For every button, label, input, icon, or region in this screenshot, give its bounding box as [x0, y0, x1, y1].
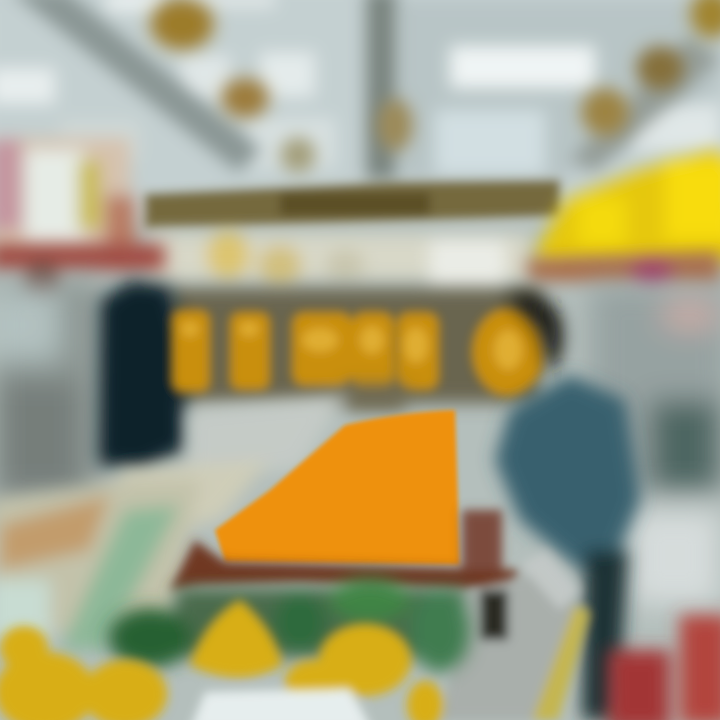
aisle floor and cart rails	[440, 550, 590, 720]
ceiling lights	[0, 0, 720, 175]
orange display	[215, 410, 460, 565]
lower left produce shelf	[0, 480, 200, 650]
red shelf strip left	[0, 244, 165, 309]
red shelf strip right	[525, 252, 720, 286]
left shelves	[0, 280, 100, 510]
red bins lower right	[608, 615, 720, 720]
left sign	[0, 138, 135, 255]
right shelves	[590, 285, 720, 605]
yellow sign right	[535, 148, 720, 264]
white label	[190, 688, 372, 720]
pale band below beam	[150, 231, 530, 290]
ceiling beams	[10, 0, 720, 180]
counter under numerals	[120, 385, 405, 540]
back wall under band	[170, 288, 540, 403]
dark header beam	[145, 180, 560, 228]
produce greens	[108, 578, 470, 672]
foreground layer	[0, 375, 720, 720]
right figure body	[495, 375, 640, 720]
cart rim under orange display	[170, 510, 520, 590]
dark figure left	[98, 280, 185, 470]
hanging decorations	[150, 0, 720, 173]
yellow fruit	[0, 600, 443, 720]
ceiling	[0, 0, 720, 220]
hanging price numerals	[172, 308, 544, 396]
right figure head	[505, 293, 563, 375]
